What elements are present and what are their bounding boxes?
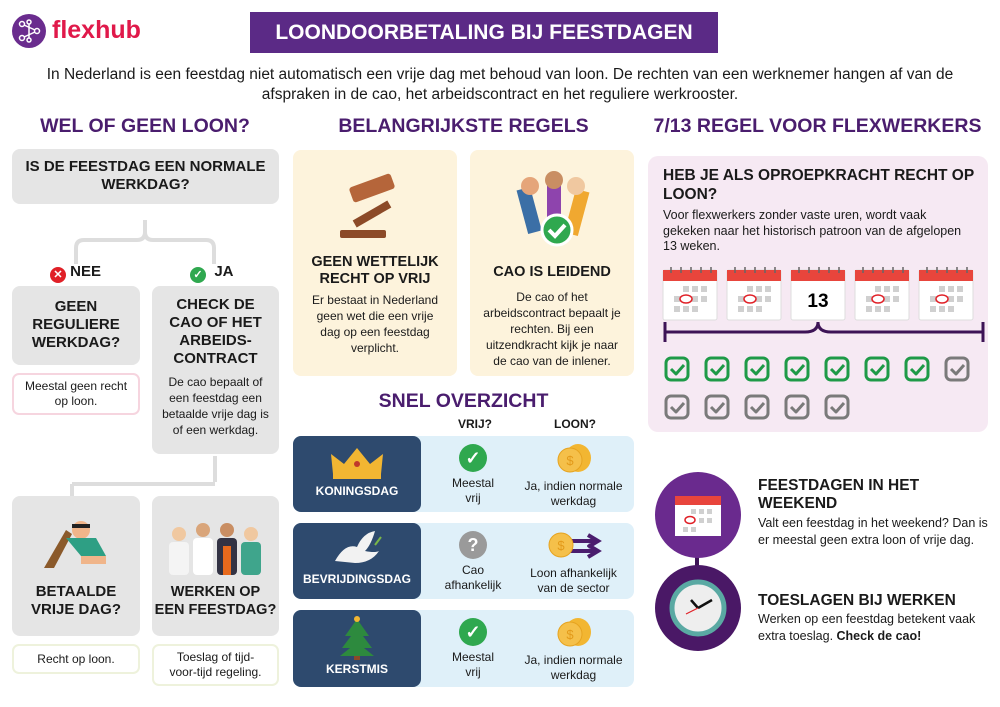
heading: snel overzicht: SNEL OVERZICHT [379, 390, 548, 412]
row: koningsdag: Ja, indien normale [524, 479, 623, 493]
box: check cao: CAO OF HET [169, 314, 262, 331]
panel: 7/13: Voor flexwerkers zonder vaste uren, wordt vaak gekeken naar het historisch patroon van de afgelopen 13 weken. [663, 208, 961, 253]
box: check cao: CONTRACT [173, 350, 258, 367]
panel: 7/13: HEB JE ALS OPROEPKRACHT RECHT OP LOON? [663, 167, 974, 203]
box: werken op feestdag: WERKEN OP [171, 584, 260, 600]
row: bevrijdingsdag: Cao [462, 563, 484, 577]
box: check cao: ARBEIDS- [179, 332, 252, 349]
calendars and checkboxes [662, 267, 984, 420]
column headers: VRIJ? [458, 417, 492, 431]
row: koningsdag: werkdag [551, 494, 596, 508]
intro text: In Nederland is een feestdag niet automatisch een vrije dag met behoud van loon. De rechten van een werknemer hangen af van de [47, 66, 953, 83]
text: toeslagen bij werken [758, 592, 976, 643]
box: check cao: De cao bepaalt of een feestdag een betaalde vrije dag is of een werkdag. [162, 375, 269, 437]
note: recht op loon: Recht op loon. [37, 652, 115, 666]
label: nee [50, 263, 101, 283]
card: cao is leidend: CAO IS LEIDEND [493, 264, 611, 280]
row: bevrijdingsdag: ? [468, 535, 478, 555]
row: kerstmis: Meestal [452, 650, 494, 664]
note: recht op loon [12, 644, 140, 674]
card: geen wettelijk recht [293, 150, 457, 376]
row: kerstmis: werkdag [551, 668, 596, 682]
row: bevrijdingsdag: $ [557, 538, 565, 553]
note: toeslag: voor-tijd regeling. [169, 665, 262, 679]
row: koningsdag: ✓ [465, 448, 481, 468]
box: betaalde vrije dag: BETAALDE [36, 583, 116, 600]
question box: WERKDAG? [101, 176, 190, 193]
row: bevrijdingsdag: afhankelijk [445, 578, 501, 592]
intro text [47, 66, 953, 103]
row: koningsdag: Meestal [452, 476, 494, 490]
row: kerstmis: KERSTMIS [326, 662, 388, 676]
row: koningsdag: $ [566, 453, 574, 468]
row: kerstmis: Ja, indien normale [524, 653, 623, 667]
logo [12, 14, 141, 48]
text: feestdagen in het weekend: Valt een feestdag in het weekend? Dan is er meestal geen extra loon of vrije dag. [758, 516, 988, 547]
box: check cao: CHECK DE [176, 296, 255, 313]
note: toeslag: Toeslag of tijd- [177, 650, 254, 664]
row: koningsdag [293, 436, 634, 512]
note: geen recht: op loon. [55, 394, 97, 408]
box: geen reguliere werkdag: GEEN [55, 298, 97, 315]
note: geen recht [12, 373, 140, 415]
box: check cao [152, 286, 279, 454]
row: bevrijdingsdag: BEVRIJDINGSDAG [303, 572, 411, 586]
icon: calendar circle [655, 472, 741, 558]
row: koningsdag: KONINGSDAG [316, 484, 398, 498]
icon: gavel [340, 174, 395, 238]
question box: IS DE FEESTDAG EEN NORMALE [25, 158, 266, 175]
label: nee: ✕ [53, 269, 63, 281]
row: koningsdag: vrij [465, 491, 481, 505]
row: bevrijdingsdag [293, 523, 634, 599]
title [250, 12, 718, 53]
calendars and checkboxes: 13 [807, 291, 829, 312]
icon: fists with check [516, 171, 590, 246]
box: geen reguliere werkdag [12, 286, 140, 365]
connector line [695, 555, 699, 567]
heading: wel of geen loon: WEL OF GEEN LOON? [40, 115, 250, 137]
card: cao is leidend: De cao of het arbeidscontract bepaalt je rechten. Bij een uitzendkracht kijk je naar de cao van de inlener. [483, 290, 621, 368]
panel: 7/13 [648, 156, 988, 432]
label: ja [190, 263, 234, 283]
note: geen recht: Meestal geen recht [25, 379, 127, 393]
box: betaalde vrije dag [12, 496, 140, 636]
card: geen wettelijk recht: RECHT OP VRIJ [320, 271, 430, 287]
text: LOON? [554, 417, 596, 431]
box: geen reguliere werkdag: REGULIERE [32, 316, 120, 333]
heading: 7/13 regel: 7/13 REGEL VOOR FLEXWERKERS [654, 115, 981, 137]
row: kerstmis [293, 610, 634, 687]
label: nee: NEE [70, 263, 101, 280]
label: ja: ✓ [193, 269, 203, 281]
row: kerstmis: ✓ [465, 622, 481, 642]
icon: clock circle [655, 565, 741, 651]
question box [12, 149, 279, 204]
text: feestdagen in het weekend [758, 477, 988, 547]
row: kerstmis: vrij [465, 665, 481, 679]
row: bevrijdingsdag: Loon afhankelijk [530, 566, 617, 580]
text: feestdagen in het weekend: FEESTDAGEN IN HET WEEKEND [758, 477, 919, 512]
text: toeslagen bij werken: TOESLAGEN BIJ WERKEN [758, 592, 956, 609]
row: bevrijdingsdag: van de sector [537, 581, 610, 595]
card: geen wettelijk recht: Er bestaat in Nederland geen wet die een vrije dag op een feestdag verplicht. [312, 293, 438, 355]
panel: flowchart [12, 149, 279, 686]
box: betaalde vrije dag: VRIJE DAG? [31, 601, 121, 618]
intro text: afspraken in de cao, het arbeidscontract en het reguliere werkrooster. [262, 86, 738, 103]
box: werken op feestdag: EEN FEESTDAG? [155, 602, 276, 618]
note: toeslag [152, 644, 279, 686]
card: cao is leidend [470, 150, 634, 376]
card: geen wettelijk recht: GEEN WETTELIJK [311, 254, 439, 270]
text: toeslagen bij werken: Werken op een feestdag betekent vaak extra toeslag. Check de cao! [758, 612, 975, 643]
box: werken op feestdag [152, 496, 279, 636]
label: ja: JA [214, 263, 234, 280]
box: geen reguliere werkdag: WERKDAG? [32, 334, 120, 351]
heading: belangrijkste regels: BELANGRIJKSTE REGELS [338, 115, 589, 137]
row: kerstmis: $ [566, 627, 574, 642]
title: LOONDOORBETALING BIJ FEESTDAGEN [275, 21, 693, 44]
logo: flexhub [52, 16, 141, 44]
